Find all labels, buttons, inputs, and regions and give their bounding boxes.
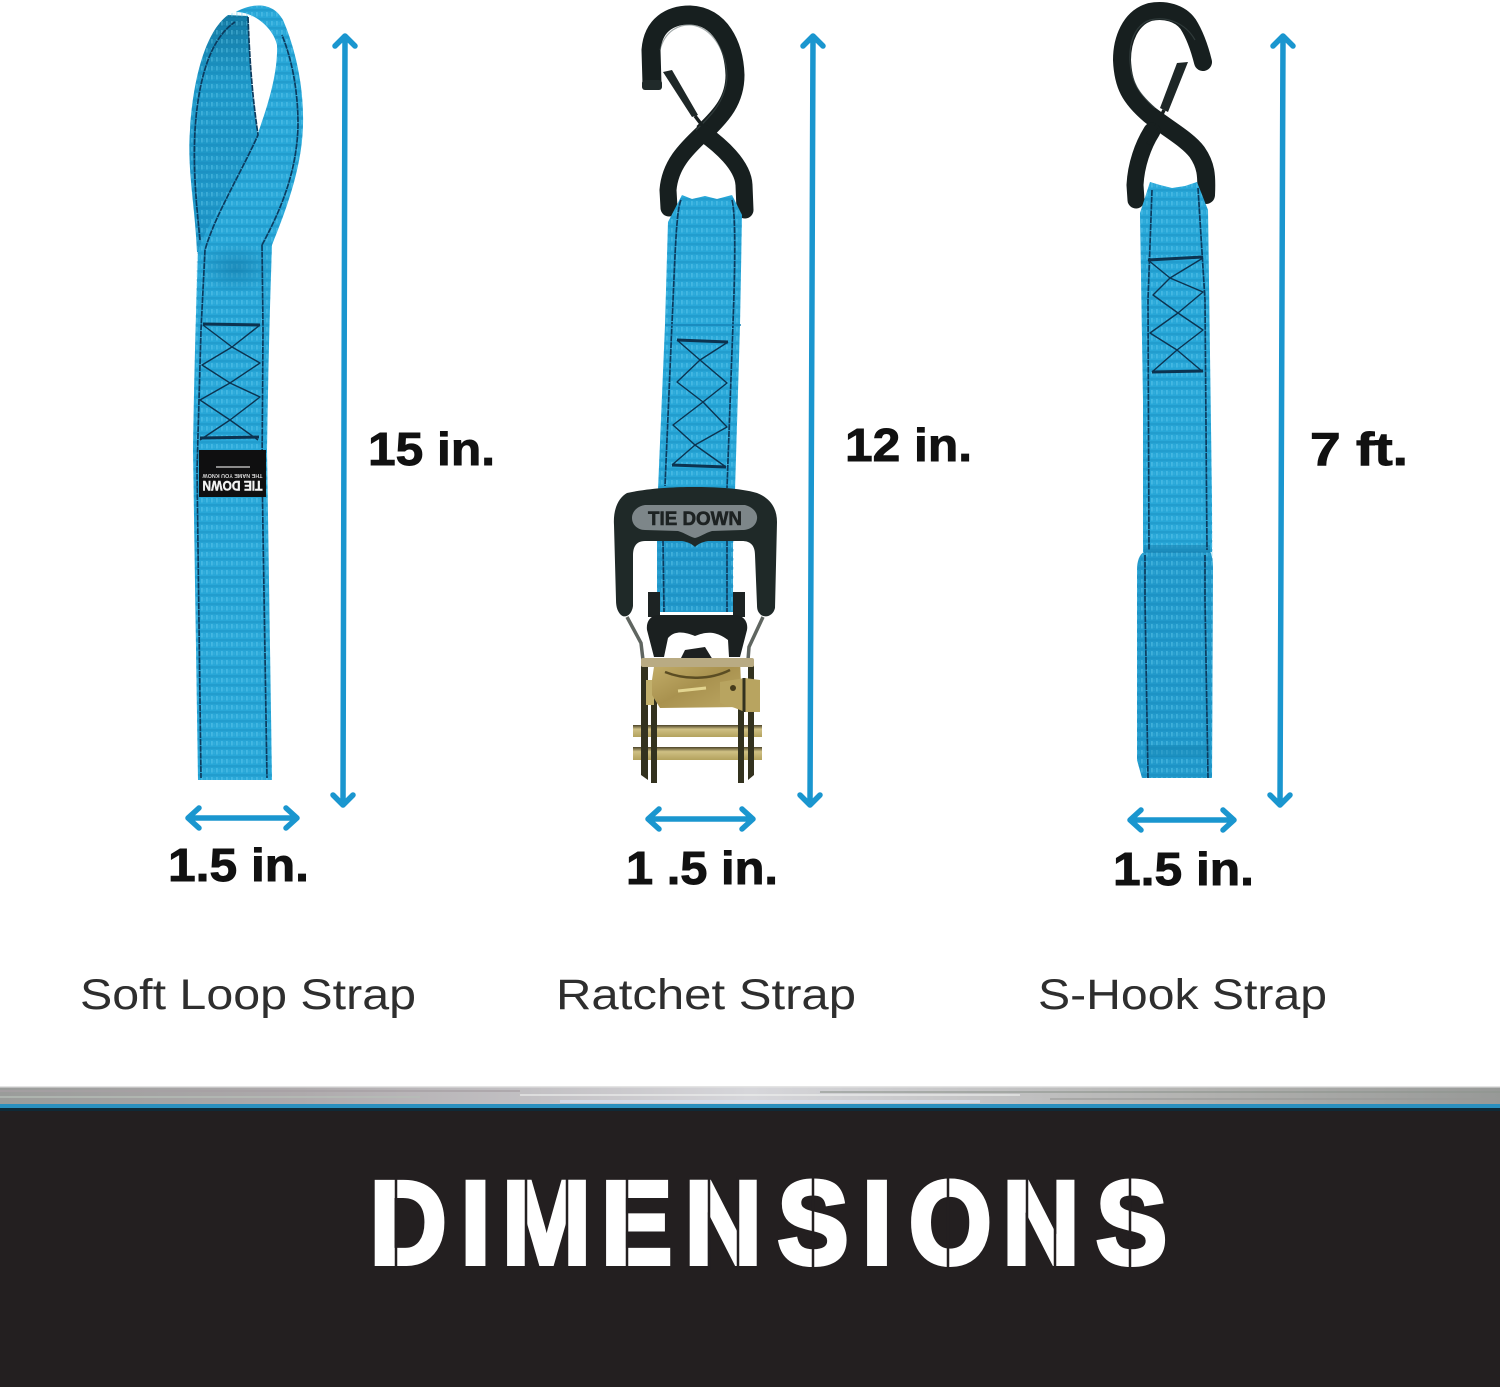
slot details (665, 670, 730, 678)
label: soft loop width: 1.5 in. (168, 839, 309, 891)
S-hook: ratchet strap (642, 15, 745, 210)
lower band shading (1145, 745, 1210, 757)
brass left tab (646, 680, 654, 705)
strap: back strand of the loop (189, 15, 258, 252)
S-hook: s-hook strap (1122, 11, 1206, 200)
label: s-hook width: 1.5 in. (1113, 843, 1254, 895)
strap upper section (1140, 182, 1212, 552)
label: ratchet width: 1 .5 in. (626, 842, 778, 894)
shading on the loop fold (198, 242, 274, 294)
top bar (641, 658, 754, 667)
fold line (665, 324, 741, 326)
weave texture (657, 195, 742, 612)
ratchet handle (614, 487, 777, 616)
name: Ratchet Strap: Ratchet Strap (556, 971, 856, 1019)
X-box stitching (1148, 257, 1203, 372)
arrow: ratchet width (648, 809, 753, 829)
label: 7 ft.: 7 ft. (1310, 423, 1408, 475)
X-box stitching (200, 324, 260, 440)
strap: front strand and tail (193, 5, 303, 780)
wire arms (627, 617, 763, 660)
panel: ratchet strap (614, 15, 777, 783)
name: Soft Loop Strap: Soft Loop Strap (80, 971, 416, 1019)
arrow: s-hook height (1270, 36, 1293, 805)
arrow: soft loop height (333, 36, 355, 805)
rear bracket (648, 592, 745, 617)
strap lower folded section (1137, 551, 1213, 778)
pawl pivot (680, 647, 713, 660)
stitching (663, 200, 735, 612)
woven label: TIE DOWN: THE NAME YOU KNOW (202, 472, 262, 478)
metallic bar (0, 1086, 1500, 1104)
woven label: TIE DOWN: TIE DOWN (202, 478, 262, 493)
arrow: ratchet height (800, 36, 823, 805)
rods (633, 725, 762, 737)
arrow: s-hook width (1130, 810, 1234, 830)
second handle (647, 615, 747, 657)
name: S-Hook Strap: S-Hook Strap (1038, 971, 1327, 1019)
woven label: TIE DOWN (199, 450, 266, 497)
brass plate (652, 660, 742, 708)
stitching (1145, 188, 1208, 778)
footer banner (0, 1086, 1500, 1387)
dark band (0, 1108, 1500, 1387)
strap below handle (657, 535, 733, 612)
panel: s-hook strap (1122, 11, 1213, 778)
stitching (194, 17, 298, 778)
title: DIMENSIONS (370, 1156, 1167, 1289)
X-box stitching (672, 340, 728, 467)
panel: soft loop strap (189, 5, 303, 780)
arrow: soft loop width (188, 808, 297, 828)
side plates (641, 665, 754, 783)
strap upper section (658, 195, 742, 490)
fold shadow (1144, 545, 1210, 553)
weave texture (1137, 182, 1213, 778)
handle grey badge (632, 505, 757, 538)
label: 15 in.: 15 in. (368, 423, 495, 475)
blue accent line (0, 1104, 1500, 1108)
label: 12 in.: 12 in. (845, 419, 972, 471)
weave texture (189, 6, 303, 780)
ratchet mechanism (627, 592, 763, 783)
brass side tab (720, 678, 760, 712)
handle grey badge: TIE DOWN (648, 509, 742, 530)
